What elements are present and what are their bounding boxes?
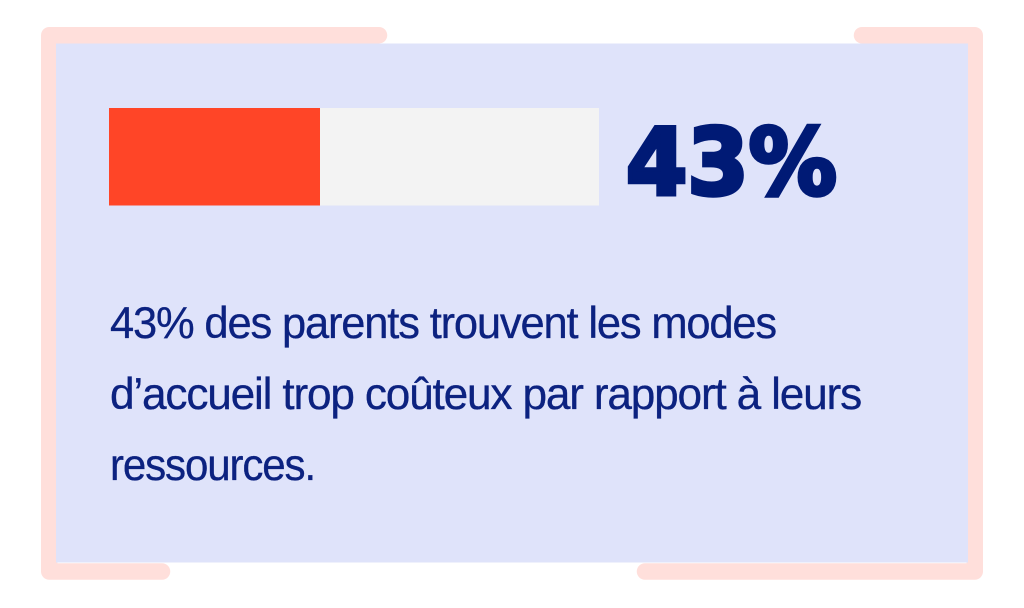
panel: background bbox=[56, 44, 968, 562]
progress bar bbox=[109, 108, 599, 206]
line 1: 43% des parents trouvent les modes bbox=[110, 299, 776, 348]
line 2: d’accueil trop coûteux par rapport à leurs bbox=[110, 370, 861, 419]
body text bbox=[110, 299, 861, 490]
bar track bbox=[109, 108, 599, 206]
big number: 43% bbox=[626, 109, 837, 216]
line 3: ressources. bbox=[110, 441, 315, 490]
bar fill 43% bbox=[109, 108, 320, 206]
frame: pink corner brackets bbox=[49, 35, 975, 572]
